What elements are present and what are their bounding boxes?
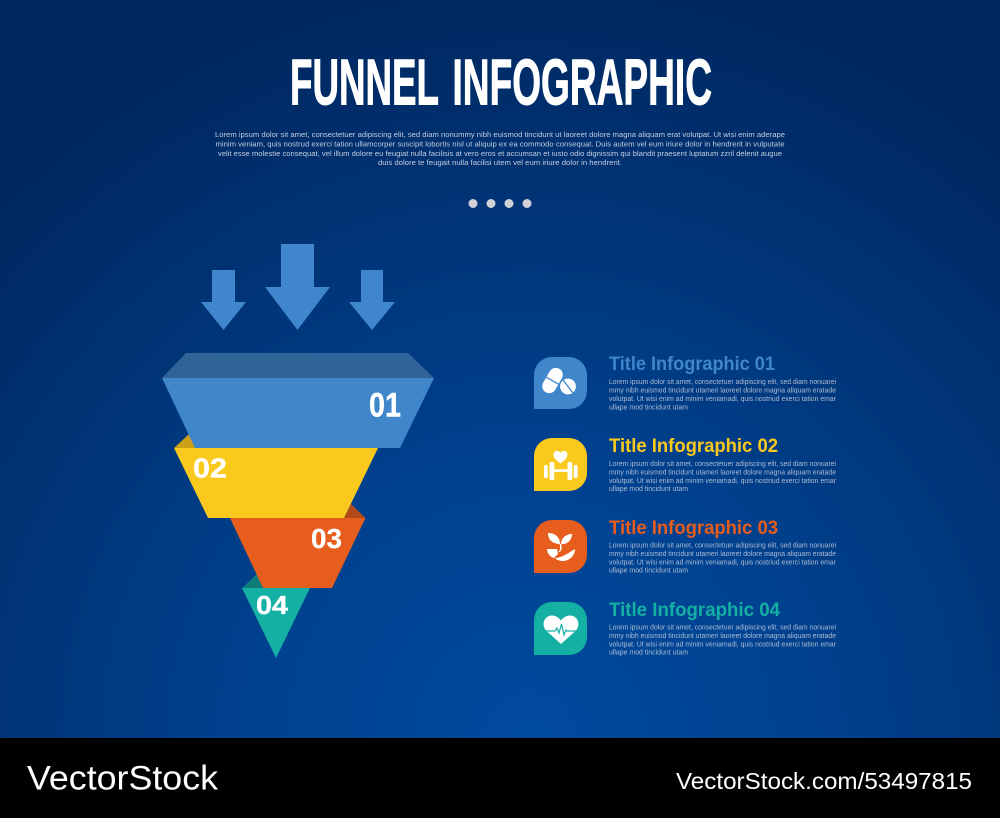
intro paragraph: Lorem ipsum dolor sit amet, consectetuer adipiscing elit, sed diam nonummy nibh euismod tincidunt ut laoreet dolore magna aliquam erat volutpat. Ut wisi enim aderape [215, 130, 785, 139]
number 01: 01 [369, 386, 401, 424]
body 02: mmy nibh euismod tincidunt utameri laoreet dolore magna aliquam eratade [609, 470, 836, 476]
title [290, 46, 712, 118]
number 02: 02 [193, 452, 227, 484]
body 02: ullape mod tincidunt utam [609, 486, 688, 493]
title 01: Title Infographic 01 [609, 354, 775, 375]
body 03 [609, 542, 837, 574]
orange back corner [344, 504, 366, 518]
body 02: Lorem ipsum dolor sit amet, consectetuer adipiscing elit, sed diam nonuarei [609, 461, 836, 468]
body 01: ullape mod tincidunt utam [609, 404, 688, 412]
item 04 [534, 600, 837, 656]
body 02: volutpat. Ut wisi enim ad minim veniamadi, quis nostriud exerci tation emar [609, 478, 837, 485]
icon: heartbeat [534, 602, 587, 655]
icon: dumbbell and heart [534, 438, 587, 491]
body 01 [609, 379, 837, 412]
number 03: 03 [311, 523, 342, 554]
body 04: volutpat. Ut wisi enim ad minim veniamadi, quis nostriud exerci tation emar [609, 642, 837, 648]
body 02 [609, 461, 837, 493]
body 01: mmy nibh euismod tincidunt utameri laoreet dolore magna aliquam eratade [609, 388, 836, 394]
intro paragraph [215, 130, 785, 167]
icon: plant in hands [534, 520, 587, 573]
body 01: Lorem ipsum dolor sit amet, consectetuer adipiscing elit, sed diam nonuarei [609, 379, 836, 386]
body 04: mmy nibh euismod tincidunt utameri laoreet dolore magna aliquam eratade [609, 633, 836, 640]
body 03: Lorem ipsum dolor sit amet, consectetuer adipiscing elit, sed diam nonuarei [609, 542, 836, 550]
segment 02 [174, 448, 378, 518]
funnel [162, 353, 434, 658]
number 04: 04 [256, 590, 289, 620]
icon: pills [534, 357, 587, 409]
title: FUNNEL [290, 46, 439, 118]
body 01: volutpat. Ut wisi enim ad minim veniamadi, quis nostriud exerci tation emar [609, 396, 837, 403]
teal back corner [242, 574, 263, 588]
intro paragraph: duis dolore te feugait nulla facilisi utem vel eum iriure dolor in hendrerit. [378, 158, 622, 167]
body 04: Lorem ipsum dolor sit amet, consectetuer adipiscing elit, sed diam nonuarei [609, 624, 836, 632]
footer url: VectorStock.com/53497815 [676, 768, 972, 794]
segment 01 [162, 378, 434, 448]
funnel top face [162, 353, 434, 378]
body 03: ullape mod tincidunt utam [609, 568, 688, 574]
yellow back corner [174, 434, 196, 448]
title 04: Title Infographic 04 [609, 600, 780, 621]
intro paragraph: velit esse molestie consequat, vel illum dolore eu feugiat nulla facilisis at vero eros et accumsan et iusto odio dignissim qui blandit praesent luptatum zzril delenit augue [218, 149, 782, 158]
body 04: ullape mod tincidunt utam [609, 650, 688, 656]
intro paragraph: minim veniam, quis nostrud exerci tation ullamcorper suscipit lobortis nisl ut aliquip ex ea commodo consequat. Duis autem vel eum iriure dolor in hendrerit in vulputate [216, 140, 784, 148]
item 03 [534, 518, 837, 574]
footer bar [0, 738, 1000, 818]
title: INFOGRAPHIC [452, 46, 712, 118]
title 03: Title Infographic 03 [609, 518, 778, 539]
body 04 [609, 624, 837, 656]
segment 04 [242, 588, 310, 658]
pagination dots [468, 199, 532, 208]
arrows into funnel [201, 244, 395, 330]
body 03: volutpat. Ut wisi enim ad minim veniamadi, quis nostriud exerci tation emar [609, 560, 837, 566]
item 02 [534, 436, 837, 493]
title 02: Title Infographic 02 [609, 436, 778, 457]
footer logo: VectorStock [27, 760, 219, 798]
body 03: mmy nibh euismod tincidunt utameri laoreet dolore magna aliquam eratade [609, 551, 836, 558]
item 01 [534, 354, 837, 412]
segment 03 [230, 518, 366, 588]
